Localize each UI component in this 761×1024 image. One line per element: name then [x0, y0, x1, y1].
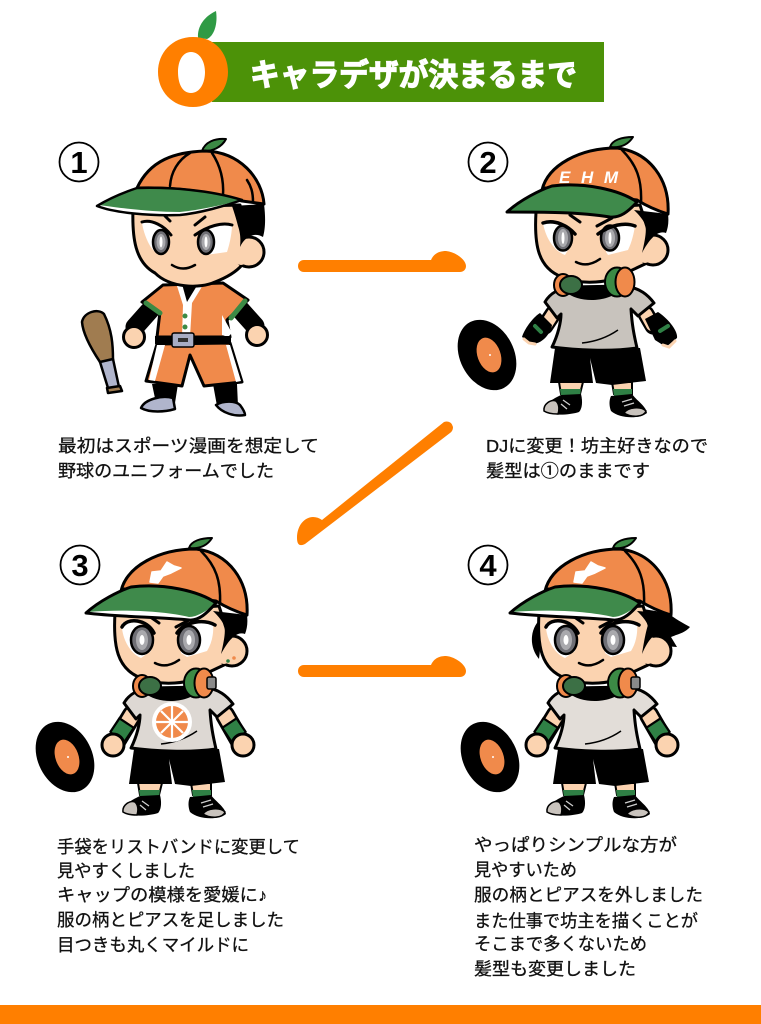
character 2: DJ with gloves: EHM [559, 168, 619, 187]
head [539, 606, 671, 683]
icon: vinyl record 4 [449, 712, 531, 802]
arrow 2 to 3 [297, 422, 453, 545]
caption 3: 手袋をリストバンドに変更して [57, 837, 300, 857]
number badge 3 [60, 546, 100, 584]
number badge 2: 2 [479, 145, 497, 180]
arrow 3 to 4 [298, 656, 466, 677]
character 1: baseball uniform [97, 139, 268, 416]
legs and shoes [152, 384, 238, 406]
cap with Ehime mark [121, 538, 247, 615]
caption 4: また仕事で坊主を描くことが [474, 911, 698, 931]
headphones [566, 282, 620, 300]
caption 3: 見やすくしました [57, 861, 195, 881]
caption 3: キャップの模様を愛媛に♪ [57, 885, 267, 905]
icon: orange logo leaf [198, 11, 217, 39]
shirt [124, 687, 233, 751]
pants [146, 343, 242, 386]
caption 4 [474, 835, 703, 979]
caption 4: 髪型も変更しました [474, 959, 636, 979]
title bar [212, 42, 604, 102]
headphones [569, 683, 623, 701]
caption 3: 服の柄とピアスを足しました [57, 910, 284, 930]
caption 2: DJに変更！坊主好きなので [486, 436, 708, 456]
number badge 1: 1 [70, 145, 88, 180]
caption 1: 野球のユニフォームでした [58, 461, 274, 481]
number badge 4: 4 [479, 548, 497, 583]
arrow 1 to 2 [298, 251, 466, 272]
caption 3 [57, 837, 300, 955]
arms and gloves [522, 312, 677, 347]
character 4: final design [510, 538, 690, 818]
shirt [545, 286, 654, 350]
number badge 1 [60, 142, 98, 182]
earrings [226, 659, 230, 663]
shirt [548, 687, 657, 751]
cap with Ehime mark [545, 538, 671, 615]
spiky hair back [643, 609, 690, 647]
caption 1: 最初はスポーツ漫画を想定して [58, 436, 319, 456]
icon: vinyl record 3 [24, 712, 106, 802]
title text: キャラデザが決まるまで [250, 58, 577, 93]
head [115, 606, 247, 683]
icon: orange logo [158, 37, 228, 107]
number badge 3: 3 [71, 548, 89, 583]
icon: vinyl record 2 [446, 310, 528, 400]
header: title banner [158, 11, 604, 107]
cap [202, 139, 226, 151]
number badge 2 [468, 142, 508, 182]
cap with EHM [542, 137, 668, 214]
arms with wristbands [102, 715, 254, 756]
character 3: orange shirt and wristbands [86, 538, 254, 818]
legs and shoes [544, 348, 647, 417]
legs and shoes [123, 749, 226, 818]
arms with wristbands [526, 715, 678, 756]
caption 3: 目つきも丸くマイルドに [57, 935, 249, 955]
legs and shoes [547, 749, 650, 818]
caption 2 [486, 436, 708, 481]
caption 4: 見やすいため [474, 860, 577, 880]
jersey [142, 283, 248, 337]
head [133, 205, 245, 286]
headphones [145, 683, 199, 701]
belt [155, 336, 231, 344]
head [536, 205, 668, 282]
character 2: DJ with gloves [507, 137, 677, 417]
icon: baseball bat [82, 311, 122, 393]
caption 4: 服の柄とピアスを外しました [474, 885, 703, 905]
number badge 4 [468, 546, 508, 584]
caption 2: 髪型は①のままです [486, 461, 650, 481]
orange slice print [152, 702, 192, 742]
caption 4: そこまで多くないため [474, 934, 647, 954]
caption 4: やっぱりシンプルな方が [474, 835, 678, 855]
arms [135, 307, 255, 327]
footer bar [0, 1005, 761, 1024]
caption 1 [58, 436, 319, 481]
